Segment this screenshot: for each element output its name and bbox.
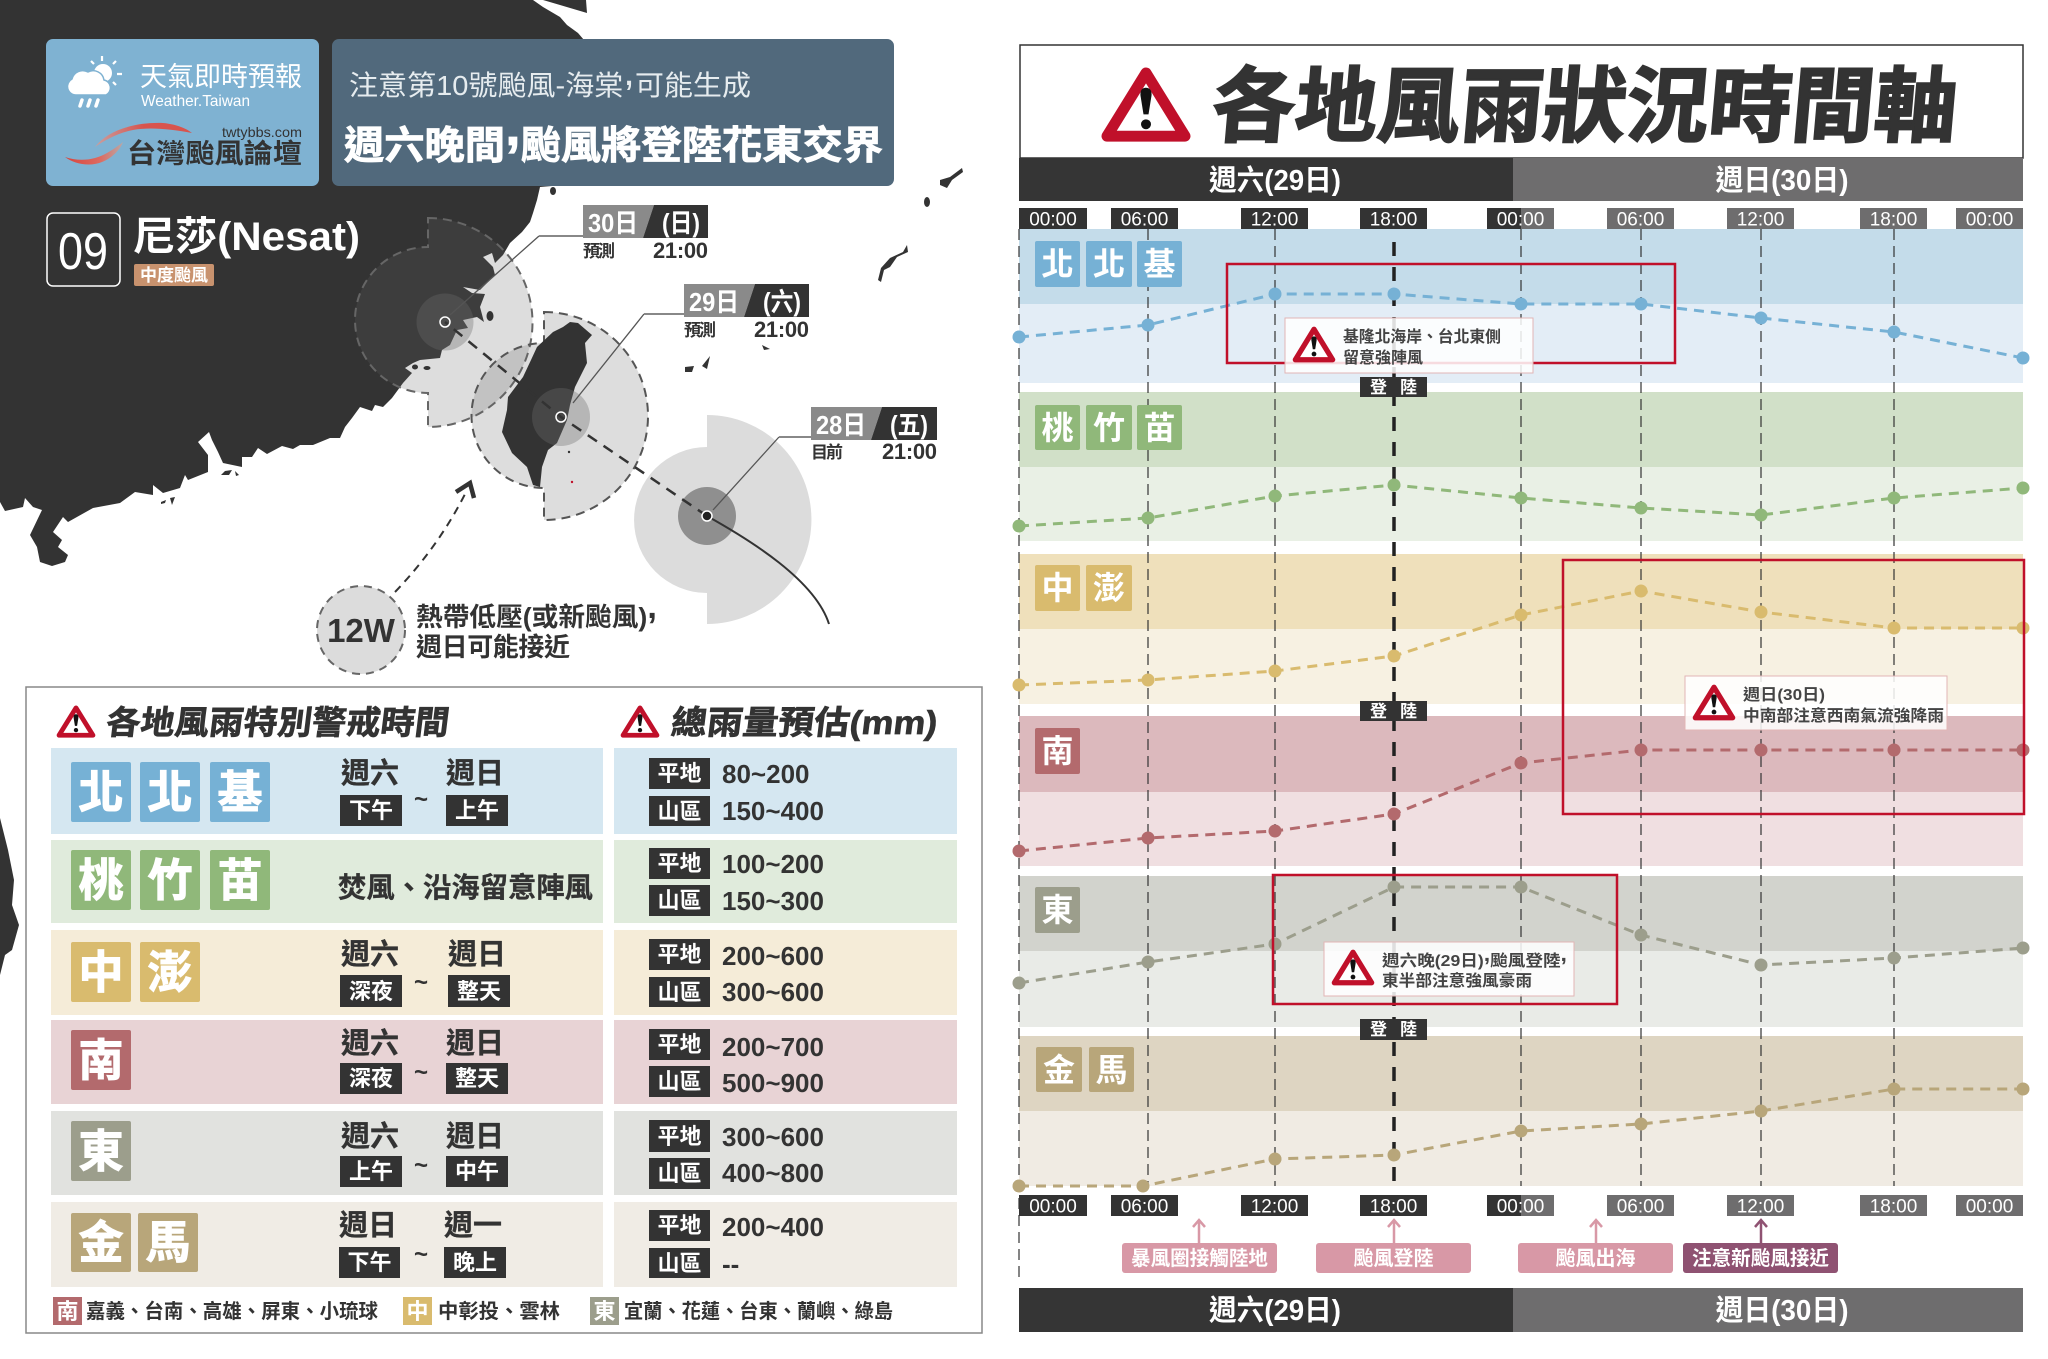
time axis: bottom [1019,1195,2023,1218]
row: 中澎: 200~600 [722,941,824,971]
row: 桃竹苗: 平地 [657,851,702,876]
row: 金馬 [51,1202,957,1287]
panel: timeline [1012,45,2030,1332]
callout: north coast gusts: 留意強陣風 [1343,348,1423,367]
region chips: 基 [1143,246,1176,282]
legend: region definitions: 中彰投、雲林 [438,1300,560,1323]
headline panel: 注意第10號颱風-海棠 [349,70,613,101]
date label: 29th forecast: 21:00 [754,317,809,342]
row: 北北基: 基 [217,767,263,818]
row: 東: 東 [78,1126,124,1177]
row: 東: ~ [414,1152,428,1179]
map: typhoon wind radius forecast 30th [355,218,532,427]
row: 桃竹苗: 竹 [147,855,193,906]
row: 南: ~ [414,1059,428,1086]
row: 東: 山區 [657,1161,702,1186]
row: 金馬: -- [722,1249,739,1279]
logo panel: 台灣颱風論壇 [127,138,302,169]
callout: eastern heavy rain: , [1484,943,1490,966]
time axis: top: 00:00 [1966,210,2013,230]
date label: 29th forecast: 預測 [684,321,716,340]
time grid lines [1019,229,1894,1279]
row: 中澎: 整天 [457,979,501,1004]
callout: eastern heavy rain: 颱風登陸 [1490,951,1561,970]
legend: region definitions [53,1297,893,1325]
headline panel [332,39,894,186]
row: 桃竹苗 [51,840,957,923]
callout: southwest flow rain [1685,676,1947,730]
typhoon name block [47,213,360,286]
map: China coastline landmass [0,0,963,975]
tropical depression 12W note: , [647,588,657,626]
row: 東: 平地 [657,1124,702,1149]
legend: region definitions: 嘉義、台南、高雄、屏東、小琉球 [86,1299,378,1323]
row: 金馬: 金 [78,1217,124,1268]
date label: 28th current: 21:00 [882,439,937,464]
date label: 28th current [713,407,937,510]
row: 金馬: 下午 [347,1250,392,1275]
row: 東 [51,1111,957,1195]
time axis: top: 12:00 [1737,210,1784,230]
region chips: 東 [1041,892,1074,928]
heading: total rainfall: 總雨量預估(mm) [669,705,940,742]
day bar: top: 週日(30日) [1716,164,1848,197]
row: 桃竹苗: 苗 [217,855,263,906]
highlight boxes [1227,264,2024,1004]
time axis: top: 18:00 [1370,210,1417,230]
region chips: 澎 [1093,570,1125,606]
time axis: top: 00:00 [1497,210,1544,230]
row: 金馬: 200~400 [722,1212,824,1242]
event: storm circle reaches land: 暴風圈接觸陸地 [1131,1247,1268,1270]
headline panel: , [505,97,521,157]
time axis: bottom: 18:00 [1870,1196,1917,1218]
region chips [1035,241,1182,1092]
row: 南: 南 [78,1035,124,1086]
event: new typhoon approaching [1683,1220,1838,1273]
row: 南: 500~900 [722,1068,824,1098]
line series: 南 [1012,744,2030,858]
event: typhoon landfall [1316,1220,1471,1273]
row: 桃竹苗: 焚風、沿海留意陣風 [338,872,593,903]
row: 南 [51,1020,957,1104]
row: 南: 整天 [455,1066,499,1091]
time axis: top: 06:00 [1121,210,1168,230]
legend: region definitions: 南 [56,1299,79,1324]
date label: 28th current: 目前 [811,443,843,462]
row: 金馬: 平地 [657,1213,702,1238]
row: 金馬: 晚上 [453,1250,497,1275]
time axis: bottom: 12:00 [1737,1196,1784,1218]
date label: 30th forecast: 21:00 [653,238,708,263]
callout: north coast gusts [1285,318,1533,373]
landfall tags: 登 陸 [1370,702,1417,721]
region chips: 北 [1093,246,1125,282]
event: storm circle reaches land [1122,1220,1277,1273]
region chips: 桃 [1041,410,1074,446]
time axis: bottom: 00:00 [1029,1196,1077,1218]
row: 桃竹苗: 100~200 [722,849,824,879]
row: 中澎: 平地 [657,942,702,967]
region chips: 南 [1041,733,1074,769]
row: 北北基: ~ [414,786,428,813]
tropical depression 12W note: 熱帶低壓(或新颱風) [416,602,641,632]
row: 東: 中午 [455,1159,499,1184]
row: 東: 上午 [349,1159,393,1184]
time axis: top: 18:00 [1870,210,1917,230]
row: 東: 400~800 [722,1158,824,1188]
landfall tags: 登 陸 [1370,378,1417,397]
row: 北北基: 80~200 [722,759,809,789]
time axis: top: 00:00 [1029,210,1077,230]
time axis: bottom: 12:00 [1251,1196,1298,1218]
row: 南: 平地 [657,1032,702,1057]
date label: 29th forecast: (六) [763,287,801,317]
row: 南: 週日 [446,1027,504,1060]
time axis: bottom: 06:00 [1617,1196,1664,1218]
row: 東: 300~600 [722,1122,824,1152]
date label: 30th forecast: 30日 [588,208,638,238]
map: eye wall 29th [532,388,590,483]
region chips: 金 [1043,1052,1075,1088]
map: small offshore islands [412,311,494,370]
row: 南: 週六 [341,1027,399,1060]
region chips: 中 [1041,570,1074,606]
event: new typhoon approaching: 注意新颱風接近 [1692,1246,1829,1270]
row: 中澎: ~ [414,969,428,996]
day bar: bottom: 週六(29日) [1209,1294,1341,1327]
day bar: top [1019,158,2023,201]
date label: 28th current: 28日 [816,410,866,440]
callout: eastern heavy rain: 週六晚(29日) [1382,953,1474,970]
row: 金馬: ~ [414,1241,428,1268]
callout: eastern heavy rain: 東半部注意強風豪雨 [1382,971,1532,990]
day bar: top: 週六(29日) [1209,164,1341,197]
row: 北北基: 平地 [657,761,702,786]
title: timeline heading [1020,45,2023,158]
row: 金馬: 週一 [444,1209,502,1242]
row: 中澎: 週六 [341,938,399,971]
row: 中澎: 週日 [448,938,506,971]
tropical depression 12W note: 週日可能接近 [416,632,570,662]
map: typhoon track [440,317,829,624]
event: typhoon landfall: 颱風登陸 [1354,1247,1434,1270]
tropical depression 12W note [317,483,657,674]
arrow: 12W approach direction [395,483,474,592]
headline panel: 週六晚間 [344,125,500,168]
row: 北北基 [51,748,957,834]
date label: 29th forecast [573,284,809,403]
time axis: bottom: 00:00 [1497,1196,1544,1218]
logo text: 天氣即時預報 [140,62,302,92]
callout: eastern heavy rain [1324,942,1574,996]
headline panel: 可能生成 [635,70,751,101]
row: 中澎: 澎 [147,947,193,998]
row: 北北基: 週日 [446,757,504,790]
date label: 30th forecast: 預測 [583,242,615,261]
row: 北北基: 北 [78,767,124,818]
row: 中澎 [51,930,957,1015]
row: 北北基: 週六 [341,757,399,790]
row: 中澎: 300~600 [722,977,824,1007]
row: 桃竹苗: 150~300 [722,886,824,916]
typhoon name block: 中度颱風 [140,265,208,285]
row: 北北基: 上午 [455,798,499,823]
panel: regional warning table [26,687,982,1333]
region chips: 北 [1041,246,1074,282]
map: typhoon wind radius current 28th [634,415,811,624]
row: 南: 山區 [657,1069,702,1094]
icon: red swoosh [65,123,192,164]
logo panel [46,39,319,186]
row: 北北基: 山區 [657,799,702,824]
row: 北北基: 150~400 [722,796,824,826]
time axis: bottom: 00:00 [1966,1196,2013,1218]
callout: southwest flow rain: 中南部注意西南氣流強降雨 [1743,706,1944,725]
icon: sun, cloud and rain [68,56,122,106]
line series: 北北基 [1012,288,2030,364]
region chips: 竹 [1093,410,1125,446]
line series: 中澎 [1012,584,2030,692]
region chips: 馬 [1095,1052,1128,1088]
row: 東: 週日 [446,1120,504,1153]
typhoon name block: 09 [58,223,108,281]
callout: southwest flow rain: 週日(30日) [1743,686,1825,704]
row: 中澎: 山區 [657,980,702,1005]
legend: region definitions: 宜蘭、花蓮、台東、蘭嶼、綠島 [624,1299,893,1323]
date label: 28th current: (五) [890,410,928,440]
date label: 29th forecast: 29日 [689,287,739,317]
time axis: top [1019,208,2023,230]
map: typhoon wind radius forecast 29th [472,312,648,520]
row: 桃竹苗: 桃 [78,855,124,906]
time axis: top: 12:00 [1251,210,1298,230]
title: timeline heading: 各地風雨狀況時間軸 [1208,62,1961,153]
logo panel: Weather.Taiwan [141,93,250,110]
row: 桃竹苗: 山區 [657,888,702,913]
legend: region definitions: 東 [593,1299,616,1324]
line series: 金馬 [1012,1082,2030,1192]
map: Taiwan island [502,322,592,487]
day bar: bottom: 週日(30日) [1716,1294,1848,1327]
callout: north coast gusts: 基隆北海岸、台北東側 [1343,327,1501,346]
row: 南: 深夜 [349,1066,393,1091]
time axis: bottom: 18:00 [1370,1196,1417,1218]
region bands [1019,229,2023,1186]
row: 金馬: 週日 [339,1209,397,1242]
line series: 桃竹苗 [1012,478,2030,532]
tropical depression 12W note: 12W [327,612,396,649]
line series: 東 [1012,880,2030,990]
row: 金馬: 山區 [657,1251,702,1276]
day bar: bottom [1019,1288,2023,1332]
row: 北北基: 北 [147,767,193,818]
headline panel: , [623,50,635,94]
row: 中澎: 深夜 [349,979,393,1004]
row: 南: 200~700 [722,1032,824,1062]
landfall tags: 登 陸 [1370,1020,1417,1039]
date label: 30th forecast [450,205,708,315]
row: 東: 週六 [341,1120,399,1153]
row: 中澎: 中 [78,947,124,998]
region chips: 苗 [1143,410,1176,446]
landfall tags [1360,377,1427,1040]
callout: eastern heavy rain: , [1561,943,1567,966]
legend: region definitions: 中 [406,1299,429,1324]
row: 金馬: 馬 [145,1217,191,1268]
time axis: bottom: 06:00 [1121,1196,1168,1218]
date label: 30th forecast: (日) [662,208,700,238]
headline panel: 颱風將登陸花東交界 [521,125,883,168]
event: typhoon exits to sea: 颱風出海 [1556,1247,1636,1270]
time axis: top: 06:00 [1617,210,1664,230]
typhoon name block: 尼莎(Nesat) [133,215,360,259]
logo panel: twtybbs.com [222,124,302,140]
event: typhoon exits to sea [1518,1220,1673,1273]
row: 北北基: 下午 [349,798,393,823]
heading: warning times: 各地風雨特別警戒時間 [104,705,452,742]
